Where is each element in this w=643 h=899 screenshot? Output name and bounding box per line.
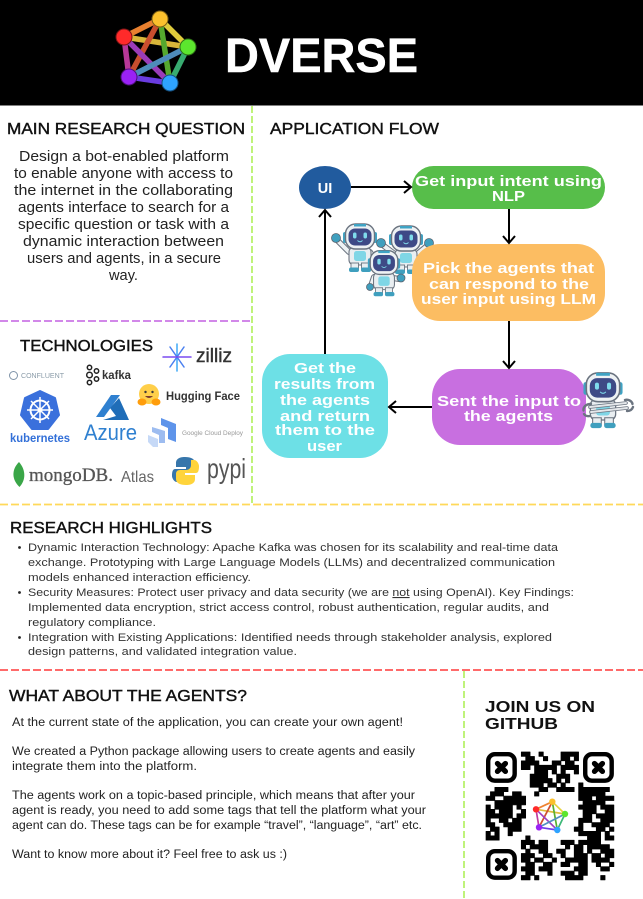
logo: MongoDB Atlas: mongoDB. [29, 465, 113, 486]
text block: research question: the internet in the collaborating [14, 183, 233, 199]
text block: agents description: integrate them into the platform. [12, 761, 197, 773]
heading: join us on github: JOIN US ON [485, 699, 595, 716]
text block: agents description: agent is ready, you need to add some tags that tell the platform what your [12, 805, 426, 817]
heading: join us on github: GITHUB [485, 716, 558, 733]
text block: research question: way. [108, 268, 138, 284]
flow node: pick the agents: Pick the agents that [423, 261, 594, 277]
heading: join us on github [485, 699, 595, 733]
flow node: get the results: user [307, 439, 342, 455]
logo: Kubernetes: kubernetes [10, 433, 70, 445]
flow node: get input intent: Get input intent using [415, 174, 602, 190]
text block: agents description: We created a Python package allowing users to create agents and easily [12, 746, 415, 758]
flow node: get the results: results from [274, 377, 375, 393]
panel: technologies [10, 338, 246, 487]
panel: join us on github [485, 699, 614, 880]
logo: PyPI [172, 453, 246, 485]
flow node: get the results: them to the [275, 423, 375, 439]
text block: research question: specific question or task with a [18, 217, 230, 233]
arrow: pick agents to sent input [503, 321, 515, 368]
flow node: get the results: and return [280, 409, 370, 425]
QR code [486, 752, 614, 880]
logo: Google Cloud Deploy: Google Cloud Deploy [182, 431, 243, 437]
robot: agent with wrench [583, 373, 633, 428]
text block: research question: users and agents, in a secure [27, 251, 221, 267]
flow node: get input intent: NLP [492, 189, 525, 205]
flow node: sent the input: Sent the input to [437, 394, 581, 410]
logo: Confluent: CONFLUENT [21, 373, 65, 380]
heading: technologies: TECHNOLOGIES [20, 338, 153, 355]
heading: what about the agents: WHAT ABOUT THE AGENTS? [9, 688, 247, 705]
text block: research question: dynamic interaction between [23, 234, 224, 250]
flow node: get input intent [412, 166, 605, 209]
arrow: results to UI [319, 210, 331, 354]
logo: Hugging Face: Hugging Face [166, 391, 240, 403]
bullet list: highlights: Implemented data encryption, strict access control, robust authentication, regular audits, and [28, 602, 549, 614]
bullet list: highlights: Dynamic Interaction Technology: Apache Kafka was chosen for its scalability and real-time data [28, 542, 559, 554]
header banner [0, 0, 643, 106]
bullet list: highlights: exchange. Prototyping with Large Language Models (LLMs) and decentralized communication [28, 557, 555, 569]
flow node: sent the input: the agents [464, 409, 553, 425]
logo: Google Cloud Deploy [148, 418, 243, 447]
text block: agents description: The agents work on a topic-based principle, which means that after your [12, 790, 415, 802]
robots: agent group [332, 224, 434, 296]
flow node: sent the input [432, 369, 586, 445]
panel: main research question [7, 121, 245, 284]
logo: PyPI: pypi [207, 453, 246, 484]
text block: agents description: At the current state of the application, you can create your own agent! [12, 717, 403, 729]
logo: MongoDB Atlas: Atlas [121, 469, 154, 486]
bullet list: highlights: Security Measures: Protect user privacy and data security (we are not using OpenAI). Key Findings: [28, 587, 574, 599]
text block: research question [14, 149, 233, 284]
bullet list: highlights: regulatory compliance. [28, 617, 156, 629]
logo: Zilliz [163, 344, 232, 371]
logo: Kafka [87, 365, 132, 385]
logo: Azure: Azure [84, 420, 137, 445]
arrow: intent to pick agents [503, 209, 515, 243]
flow node: get the results: the agents [280, 393, 370, 409]
flow node: get the results: Get the [294, 361, 356, 377]
panel: what about the agents [9, 688, 426, 861]
text block: research question: to enable anyone with access to [14, 166, 233, 182]
heading: research highlights: RESEARCH HIGHLIGHTS [10, 520, 212, 537]
arrow: UI to intent [351, 181, 411, 193]
flow node: UI: UI [318, 181, 332, 197]
bullet list: highlights: models enhanced interaction efficiency. [28, 572, 251, 584]
flow node: pick the agents [412, 244, 605, 321]
text block: agents description [12, 717, 426, 861]
flow node: get the results [262, 354, 388, 458]
bullet list: highlights [18, 542, 574, 658]
title: DVERSE [225, 30, 418, 83]
flow node: pick the agents: user input using LLM [421, 292, 596, 308]
text block: research question: Design a bot-enabled platform [19, 149, 229, 165]
logo: Kubernetes [10, 391, 70, 445]
heading: application flow: APPLICATION FLOW [270, 121, 439, 138]
heading: main research question: MAIN RESEARCH QUESTION [7, 121, 245, 138]
flow node: pick the agents: can respond to the [429, 277, 589, 293]
logo: Hugging Face [138, 384, 240, 406]
logo: Kafka: kafka [102, 370, 132, 382]
bullet list: highlights: design patterns, and validated integration value. [28, 646, 297, 658]
text block: agents description: agent can do. These tags can be for example “travel”, “language”, “art” etc. [12, 820, 422, 832]
bullet list: highlights: Integration with Existing Applications: Identified needs through stakeholder analysis, explored [28, 632, 552, 644]
logo: Azure [84, 395, 137, 445]
arrow: sent input to results [389, 401, 432, 413]
panel: application flow [262, 121, 633, 458]
panel: research highlights [10, 520, 574, 658]
icon: DVERSE network logo [116, 11, 196, 91]
flow node: UI [299, 166, 351, 209]
text block: research question: agents interface to search for a [18, 200, 230, 216]
logo: MongoDB Atlas [13, 462, 154, 487]
icon: QR centre logo [533, 798, 568, 833]
logo: Zilliz: zilliz [196, 346, 232, 367]
logo: Confluent [10, 372, 65, 380]
text block: agents description: Want to know more about it? Feel free to ask us :) [12, 849, 287, 861]
